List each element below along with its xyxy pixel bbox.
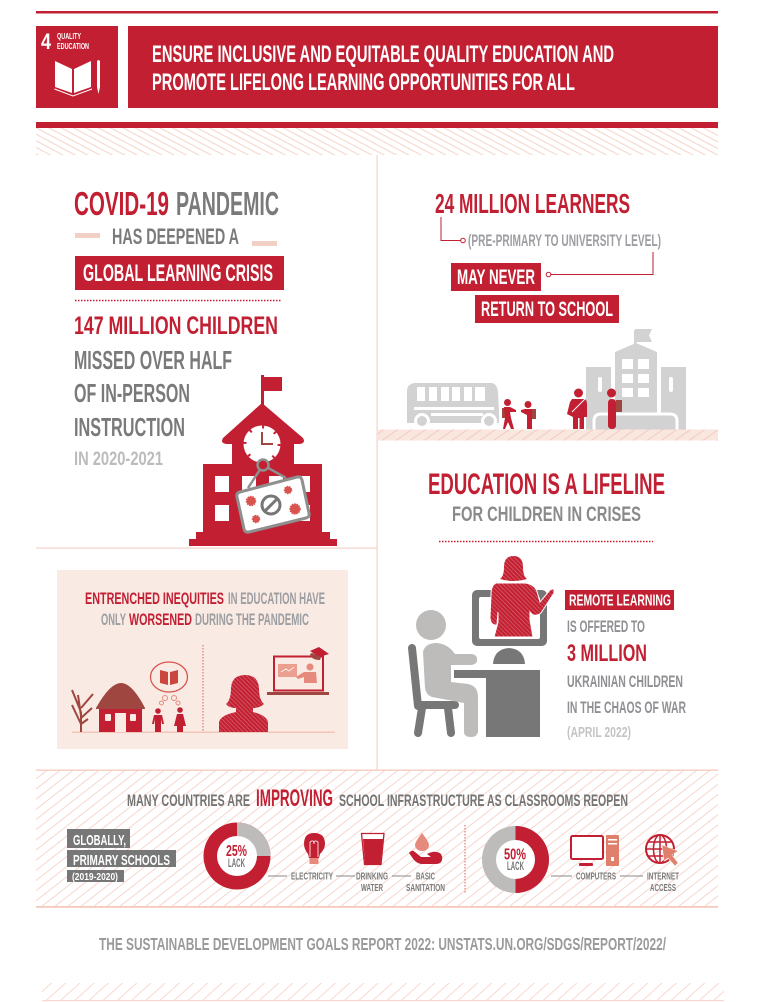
heading: many countries are improving: IMPROVING [256, 785, 333, 812]
icon: hut [96, 683, 145, 732]
label: return to school: RETURN TO SCHOOL [481, 298, 613, 321]
heading: 24 million learners: 24 MILLION LEARNERS [435, 188, 630, 219]
text: remote learning statistic: (APRIL 2022) [567, 724, 631, 741]
badge: SDG 4 quality education [36, 26, 118, 108]
text: inequities heading: ENTRENCHED INEQUITIES [85, 589, 224, 608]
label: globally primary schools: (2019-2020) [72, 872, 118, 883]
labels: computers, internet access: ACCESS [650, 882, 676, 894]
icon: school building [586, 329, 686, 430]
chart: 50% lack donut: LACK [507, 859, 524, 873]
icon: bare tree [72, 690, 93, 732]
panel: 24 million learners [377, 188, 718, 440]
statistic: 147 million children: MISSED OVER HALF [74, 345, 232, 375]
label: globally primary schools: GLOBALLY, [73, 832, 126, 849]
statistic: 147 million children: 147 MILLION CHILDREN [74, 312, 278, 340]
icon: online teacher on screen [267, 647, 329, 695]
heading: many countries are improving [127, 785, 628, 812]
chart: 50% lack donut [482, 826, 549, 893]
text: inequities heading: DURING THE PANDEMIC [195, 610, 309, 629]
badge: SDG 4 quality education: 4 [41, 29, 52, 54]
text: remote learning statistic: 3 MILLION [567, 640, 647, 667]
text: remote learning statistic: UKRAINIAN CHILDREN [567, 673, 683, 691]
icon: remote learning at a computer [412, 556, 554, 737]
badge: SDG 4 quality education: QUALITY [57, 31, 81, 41]
labels: electricity, water, sanitation: DRINKING [356, 870, 388, 882]
panel: education is a lifeline [412, 468, 686, 741]
label: may never [451, 263, 541, 291]
statistic: 147 million children [74, 312, 278, 470]
chart: 25% lack donut [204, 822, 270, 890]
label: return to school [475, 295, 619, 323]
icon: closed school with sign [189, 375, 337, 546]
statistic: 147 million children: INSTRUCTION [74, 412, 185, 442]
icon: boy [152, 708, 164, 732]
panel: improving school infrastructure [36, 770, 718, 908]
labels: electricity, water, sanitation: WATER [361, 882, 383, 894]
text: remote learning statistic [565, 590, 686, 741]
label: global learning crisis [75, 256, 284, 290]
badge: SDG 4 quality education: EDUCATION [57, 41, 89, 51]
chart: 25% lack donut: 25% [226, 843, 247, 860]
icon: thought bubble with book [150, 662, 188, 705]
heading: COVID-19 pandemic: PANDEMIC [176, 185, 279, 222]
connector arrow left [441, 217, 465, 243]
banner heading [128, 26, 718, 108]
ground band [377, 430, 718, 440]
labels: electricity, water, sanitation: SANITATION [406, 882, 445, 894]
labels: computers, internet access: COMPUTERS [576, 870, 616, 882]
labels: computers, internet access [551, 870, 679, 894]
panel: entrenched inequities [57, 570, 348, 749]
connector arrow right [546, 252, 653, 277]
labels: computers, internet access: INTERNET [647, 870, 679, 882]
text: inequities heading: ONLY [101, 610, 126, 629]
labels: electricity, water, sanitation: ELECTRICITY [291, 870, 333, 882]
icon: girl [174, 707, 186, 732]
label: globally primary schools: PRIMARY SCHOOLS [73, 852, 170, 869]
text: remote learning statistic: REMOTE LEARNING [569, 592, 671, 610]
panel: COVID-19 learning crisis [74, 185, 337, 546]
icon: sanitation hand and drop [409, 833, 442, 864]
heading: education is a lifeline [428, 468, 665, 526]
label: global learning crisis: GLOBAL LEARNING CRISIS [83, 260, 273, 287]
heading: many countries are improving: MANY COUNTRIES ARE [127, 791, 250, 810]
labels: electricity, water, sanitation [268, 870, 445, 894]
icon: school bus [407, 383, 499, 429]
text: remote learning statistic: IN THE CHAOS OF WAR [567, 699, 686, 717]
labels: electricity, water, sanitation: BASIC [416, 870, 435, 882]
text: inequities heading: IN EDUCATION HAVE [228, 589, 325, 608]
label: globally primary schools [67, 829, 176, 883]
text: inequities heading [85, 589, 325, 629]
top rule [36, 11, 718, 14]
text: inequities heading: WORSENED [129, 610, 192, 629]
statistic: 147 million children: IN 2020-2021 [74, 449, 163, 470]
icon: drinking water glass [362, 834, 384, 864]
icon: children and students [502, 388, 622, 429]
chart: 50% lack donut: 50% [504, 846, 526, 864]
statistic: 147 million children: OF IN-PERSON [74, 378, 190, 408]
chart: 25% lack donut: LACK [228, 856, 245, 870]
heading: COVID-19 pandemic: COVID-19 [74, 185, 169, 222]
label: may never: MAY NEVER [457, 266, 535, 289]
thick rule [36, 122, 718, 128]
icon: internet globe and cursor [646, 835, 678, 866]
text: remote learning statistic: IS OFFERED TO [567, 618, 645, 636]
icon: computer [571, 835, 619, 866]
icon: electricity bulb [304, 833, 325, 864]
subheading: HAS DEEPENED A [112, 224, 239, 249]
icon: woman silhouette [219, 675, 268, 732]
heading: education is a lifeline: FOR CHILDREN IN CRISES [452, 503, 641, 526]
